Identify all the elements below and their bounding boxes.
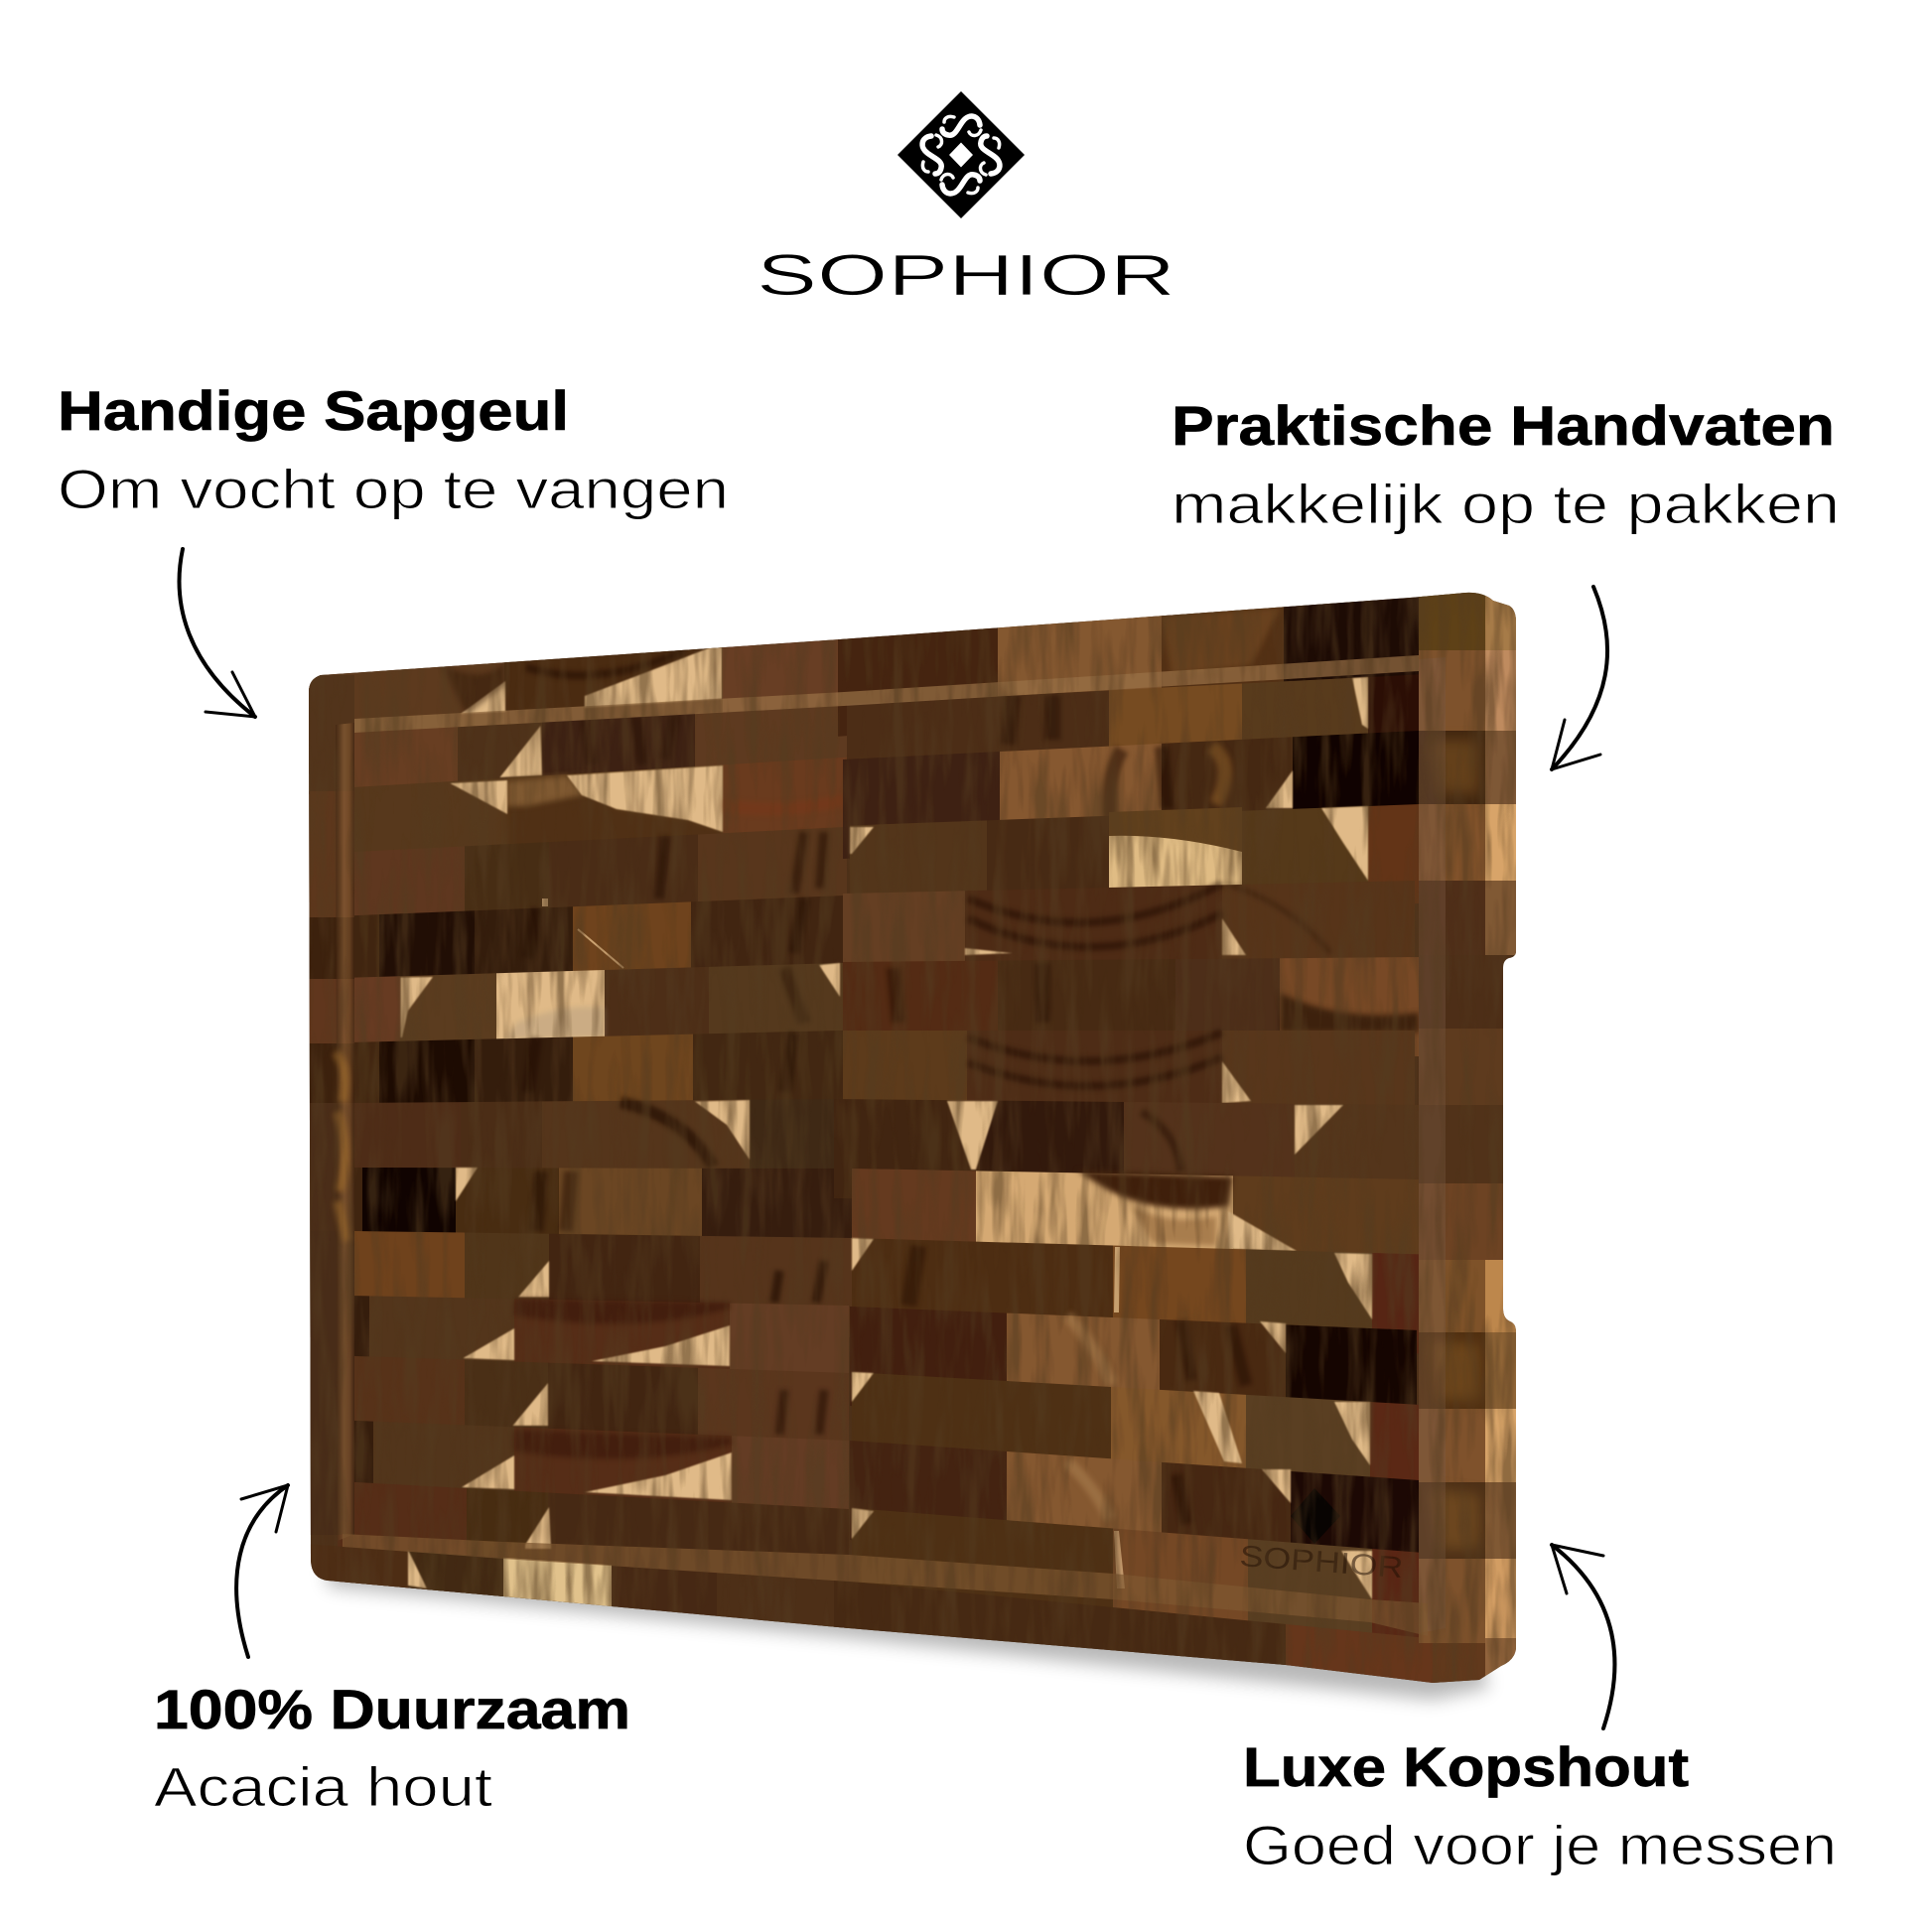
right half row 2 [843, 731, 1419, 859]
left half row 3 [354, 827, 847, 915]
left half row 1 [354, 707, 847, 787]
right half row 13 [852, 1508, 1419, 1662]
left half row 11 [354, 1356, 849, 1441]
base wood [298, 586, 1529, 1698]
arrow: to end grain [1552, 1545, 1614, 1728]
right half row 12 [850, 1441, 1419, 1580]
cutting board [309, 592, 1516, 1683]
left half row 12 [338, 1420, 849, 1540]
top juice groove [354, 655, 1419, 733]
text: 100% Duurzaam [154, 1678, 630, 1818]
right half row 6 [843, 1031, 1415, 1130]
right half row 14: bottom frame [834, 1581, 1435, 1778]
right half row 11 [852, 1372, 1419, 1504]
left half row 0 [303, 639, 847, 774]
left half row 2 [354, 758, 847, 851]
left half row 8 [354, 1167, 852, 1238]
logo wordmark: SOPHIOR [757, 243, 1175, 308]
bottom juice groove [343, 1534, 1428, 1636]
left half row 4 [354, 896, 843, 977]
text: Praktische Handvaten: Praktische Handvaten [1172, 394, 1835, 457]
left half row 13 [338, 1481, 849, 1618]
text: Handige Sapgeul: Handige Sapgeul [58, 379, 569, 442]
right half row 5 [843, 957, 1419, 1061]
right frame and side face [1419, 586, 1519, 1693]
text: 100% Duurzaam: Acacia hout [154, 1755, 493, 1818]
text: Praktische Handvaten [1172, 394, 1840, 535]
arrow: to acacia wood [236, 1485, 288, 1657]
arrow: to handles [1552, 587, 1607, 769]
right half row 0 [838, 597, 1423, 737]
left frame [303, 675, 354, 1541]
left half row 10 [354, 1295, 849, 1373]
text: Luxe Kopshout [1243, 1735, 1837, 1876]
right half row 4 [843, 881, 1415, 993]
right half row 10 [850, 1307, 1417, 1430]
left half row 6 [354, 1031, 843, 1103]
left half row 9 [354, 1231, 852, 1311]
left half row 14: bottom frame [303, 1544, 849, 1701]
board shadow [328, 1559, 1489, 1700]
text: Praktische Handvaten: makkelijk op te pakken [1172, 473, 1840, 535]
right half row 9 [852, 1238, 1419, 1353]
stamped SOPHIOR wordmark: SOPHIOR [1238, 1540, 1404, 1585]
stamped diamond logo [1291, 1488, 1340, 1544]
wood grain texture [303, 586, 1524, 1693]
text: Handige Sapgeul: Om vocht op te vangen [58, 458, 729, 520]
text: Luxe Kopshout: Goed voor je messen [1243, 1814, 1837, 1876]
arrow: to juice groove [180, 549, 255, 717]
right half row 1 [847, 674, 1420, 803]
text: 100% Duurzaam: 100% Duurzaam [154, 1678, 630, 1740]
right half row 8 [852, 1169, 1419, 1279]
logo: diamond emblem [897, 91, 1025, 218]
text: Luxe Kopshout: Luxe Kopshout [1243, 1735, 1689, 1798]
right half row 3 [850, 804, 1420, 924]
text: Handige Sapgeul [58, 379, 729, 520]
left half row 7 [354, 1095, 834, 1169]
left half row 5 [354, 962, 843, 1042]
right half row 7 [834, 1099, 1419, 1204]
